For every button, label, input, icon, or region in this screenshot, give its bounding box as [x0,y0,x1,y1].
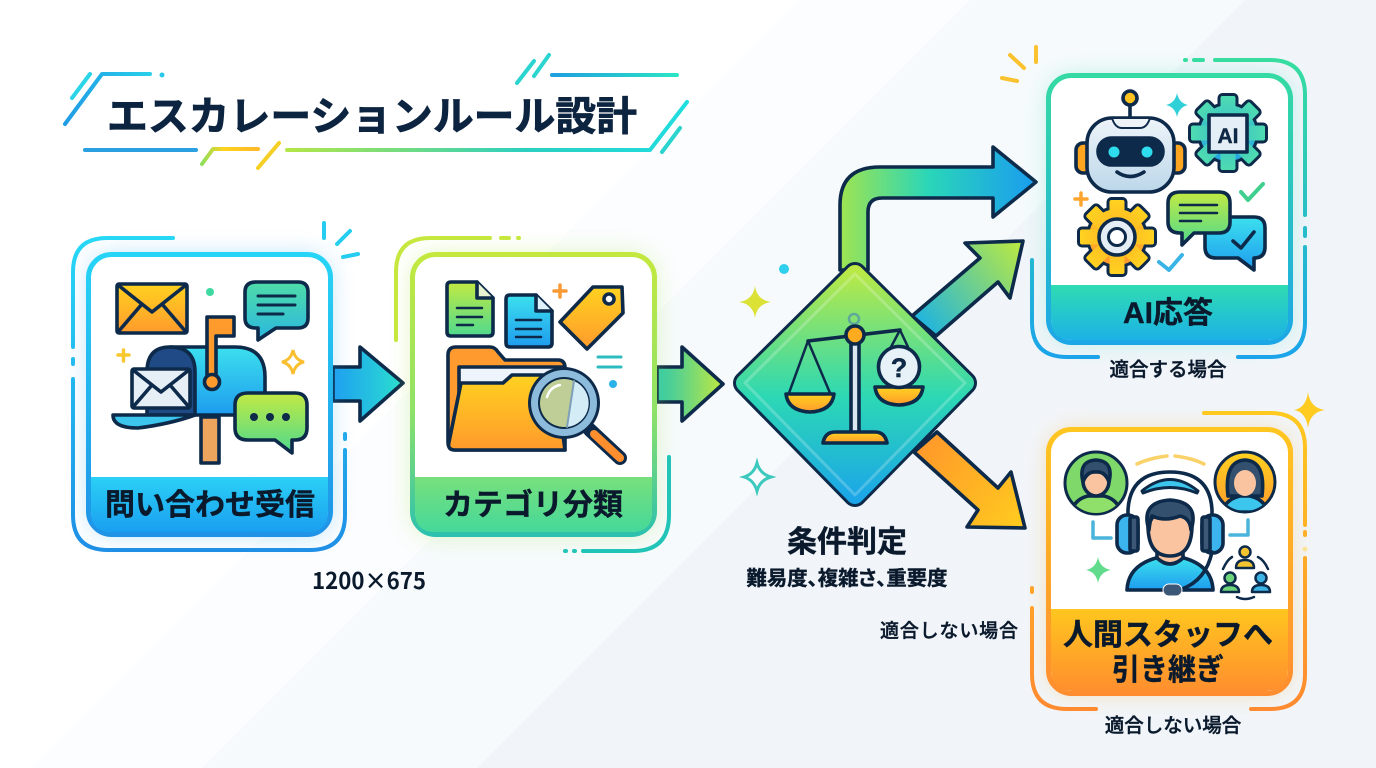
icon: tag [560,287,623,349]
arrow: diagonal up [912,241,1023,336]
decision heading: 条件判定 [787,526,907,559]
band [1051,609,1288,691]
icon: robot [1076,91,1185,192]
band [91,477,328,532]
label: not suitable: 適合しない場合 [1105,715,1242,737]
mid label: not suitable: 適合しない場合 [880,620,1018,642]
icon: burst [1002,47,1036,81]
panel: category classification [396,238,669,551]
label: カテゴリ分類 [443,488,623,522]
icon: chat bubbles [1168,192,1265,270]
arrow: diagonal down [914,432,1025,528]
icon: envelope [117,284,187,333]
icon: team [1221,546,1270,599]
label: AI応答 [1123,297,1213,330]
arrow: classify to decision [657,347,723,421]
decision diamond: ? [891,353,907,383]
title text: エスカレーションルール設計 [107,95,637,139]
label: suitable: 適合する場合 [1109,359,1227,381]
label: 問い合わせ受信 [105,489,315,522]
icon: orange gear [1080,200,1154,274]
icon: chat bubble [245,282,308,340]
sparkles [739,264,789,491]
decision criteria: 難易度、複雑さ、重要度 [746,567,948,590]
title [65,55,687,168]
size note: 1200×675 [312,562,426,596]
icon: scales [786,314,923,443]
panel: AI response [1002,47,1305,357]
band [415,477,652,532]
icon: magnifier [528,367,620,458]
decision diamond [745,274,965,495]
icon: left avatar [1065,452,1127,515]
panel: human handoff: 引き継ぎ [1112,654,1224,687]
icon: star [1294,392,1325,428]
title decoration [65,55,687,168]
icon: agent [1117,472,1223,596]
icon: right avatar [1215,452,1275,512]
icon: green bubble [235,393,307,453]
icon: AI gear: AI [1218,125,1238,148]
icon: mailbox [113,317,265,463]
icon: AI gear [1191,96,1265,170]
icon: green star [1086,557,1111,583]
arrow: receive to classify [333,347,403,421]
icon: burst [324,223,358,257]
label: 人間スタッフへ [1063,619,1273,652]
panel: inquiry received [73,223,358,550]
band [1051,285,1288,340]
icon: documents [447,282,552,347]
icon: arcs and brackets [1137,456,1204,464]
arrow: to AI response [840,147,1036,270]
panel: human handoff [1032,392,1325,709]
icon: folder [448,347,565,450]
